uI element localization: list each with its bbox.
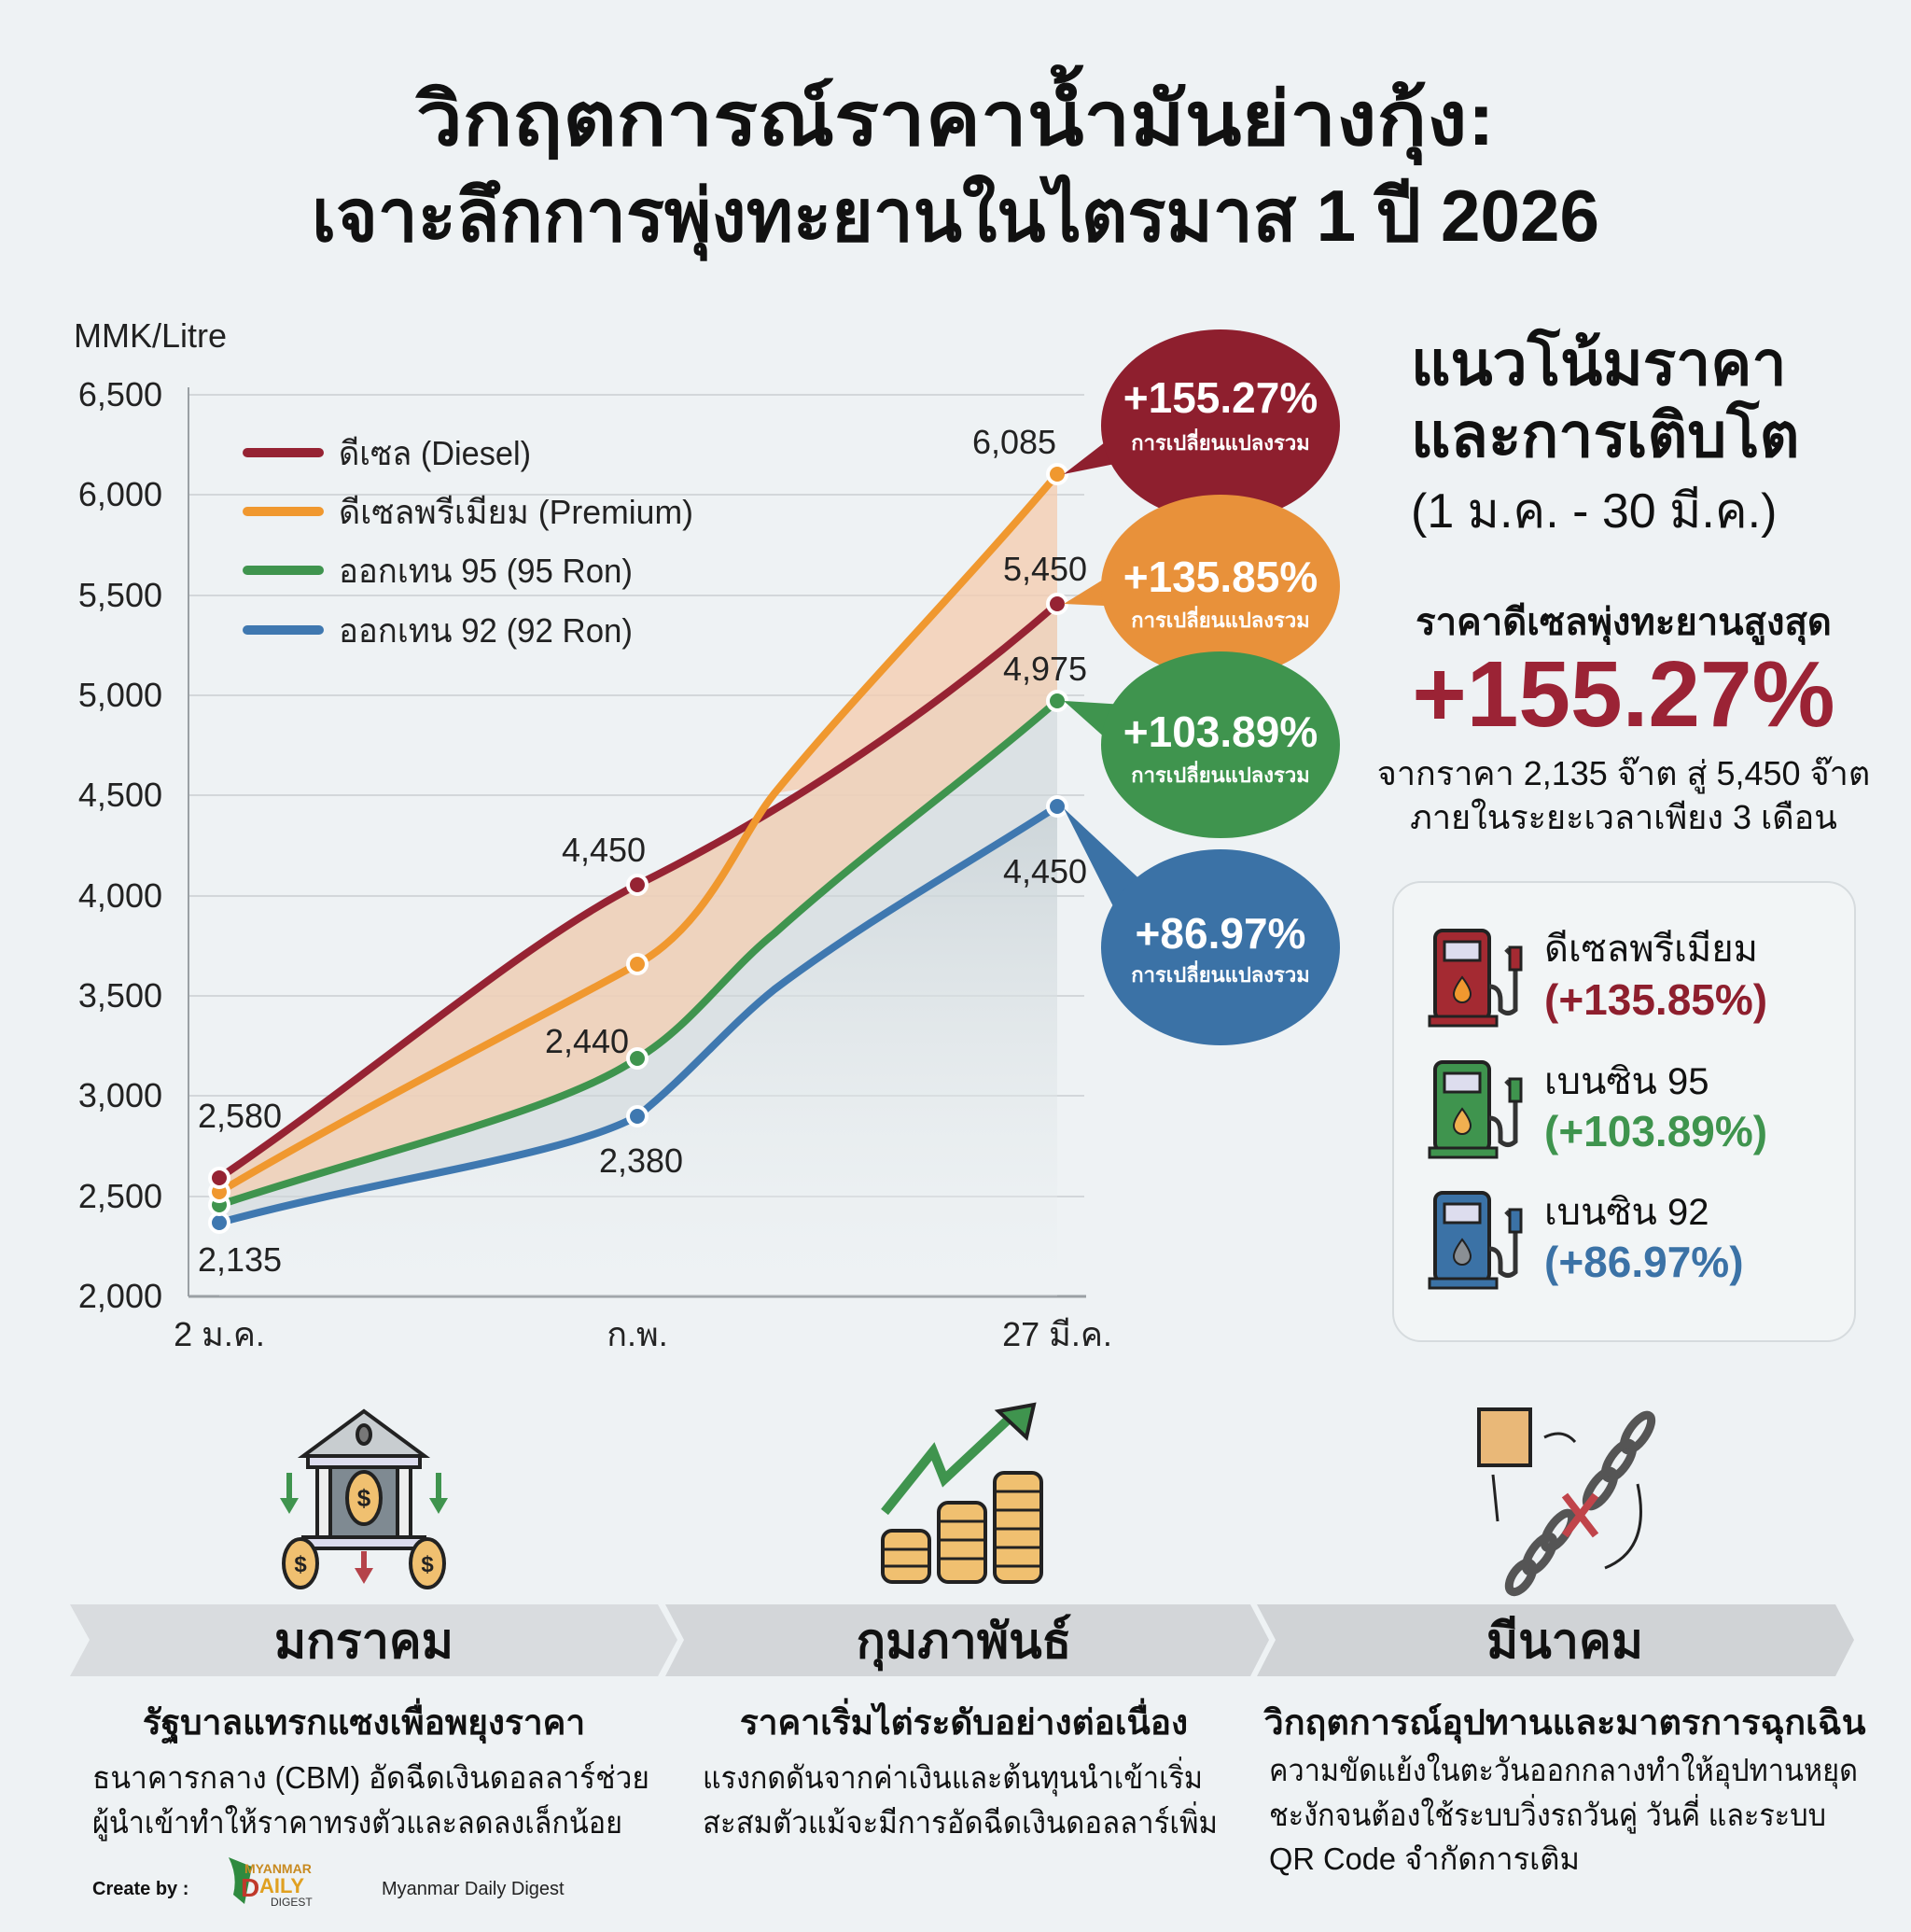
- x axis labels: ก.พ.: [607, 1315, 668, 1353]
- January text: ธนาคารกลาง (CBM) อัดฉีดเงินดอลลาร์ช่วย: [92, 1760, 649, 1795]
- value labels: 4,975: [1003, 650, 1087, 688]
- bubble: premium: [1064, 495, 1340, 678]
- timeline chevrons: [70, 1604, 1854, 1676]
- icon: central bank: $: [294, 1552, 307, 1577]
- bubble: premium: +135.85%: [1123, 553, 1318, 601]
- y axis labels: 5,000: [78, 676, 162, 714]
- panel heading: [1411, 327, 1800, 539]
- February text: [703, 1698, 1218, 1840]
- value labels: 2,440: [545, 1022, 629, 1060]
- logo: AILY: [259, 1874, 304, 1897]
- value labels: 5,450: [1003, 550, 1087, 588]
- value labels: 4,450: [1003, 852, 1087, 890]
- legend: ออกเทน 92 (92 Ron): [339, 611, 633, 650]
- headline stat: ภายในระยะเวลาเพียง 3 เดือน: [1410, 798, 1837, 836]
- March text: QR Code จำกัดการเติม: [1269, 1841, 1580, 1876]
- timeline chevrons: กุมภาพันธ์: [857, 1614, 1071, 1672]
- March text: วิกฤตการณ์อุปทานและมาตรการฉุกเฉิน: [1262, 1703, 1866, 1744]
- title: เจาะลึกการพุ่งทะยานในไตรมาส 1 ปี 2026: [312, 174, 1599, 261]
- logo: D: [241, 1873, 259, 1902]
- panel heading: แนวโน้มราคา: [1411, 327, 1787, 398]
- panel heading: และการเติบโต: [1411, 399, 1800, 469]
- icon: blue pump: [1430, 1193, 1521, 1288]
- logo: [229, 1857, 313, 1909]
- icon: central bank: [280, 1411, 448, 1588]
- data point markers: [210, 465, 1067, 1232]
- March text: ความขัดแย้งในตะวันออกกลางทำให้อุปทานหยุด: [1269, 1753, 1858, 1789]
- February text: สะสมตัวแม้จะมีการอัดฉีดเงินดอลลาร์เพิ่ม: [703, 1801, 1218, 1840]
- bubble: diesel: การเปลี่ยนแปลงรวม: [1131, 427, 1310, 455]
- y axis labels: [78, 375, 162, 1315]
- fuel summary box: (+135.85%): [1544, 975, 1767, 1024]
- legend: ออกเทน 95 (95 Ron): [339, 552, 633, 590]
- x axis labels: [174, 1315, 1112, 1353]
- callout bubbles: [1064, 329, 1340, 1045]
- area fills: [219, 806, 1057, 1296]
- value labels: 2,580: [198, 1097, 282, 1135]
- title: [312, 64, 1599, 261]
- x axis labels: 2 ม.ค.: [174, 1315, 265, 1353]
- timeline chevrons: มกราคม: [274, 1615, 453, 1669]
- value labels: 2,380: [599, 1141, 683, 1180]
- bubble: 95: [1064, 651, 1340, 838]
- y axis labels: 6,000: [78, 475, 162, 513]
- headline stat: ราคาดีเซลพุ่งทะยานสูงสุด: [1416, 602, 1832, 646]
- timeline chevrons: มีนาคม: [1486, 1615, 1643, 1669]
- icon: broken supply chain: [1479, 1409, 1656, 1596]
- February text: แรงกดดันจากค่าเงินและต้นทุนนำเข้าเริ่ม: [703, 1757, 1203, 1797]
- bubble: 95: +103.89%: [1123, 707, 1318, 756]
- February text: ราคาเริ่มไต่ระดับอย่างต่อเนื่อง: [740, 1698, 1188, 1742]
- panel heading: (1 ม.ค. - 30 มี.ค.): [1411, 484, 1777, 539]
- icon: rising coins: [883, 1405, 1041, 1582]
- y axis labels: 3,500: [78, 976, 162, 1015]
- y axis labels: 5,500: [78, 576, 162, 614]
- bubble: 92: [1064, 808, 1340, 1045]
- y axis labels: 2,500: [78, 1177, 162, 1215]
- y axis labels: 2,000: [78, 1277, 162, 1315]
- footer credit: Myanmar Daily Digest: [382, 1879, 565, 1899]
- bubble: 92: การเปลี่ยนแปลงรวม: [1131, 959, 1310, 987]
- legend: ดีเซลพรีเมียม (Premium): [339, 493, 693, 531]
- bubble: diesel: +155.27%: [1123, 373, 1318, 422]
- legend: ดีเซล (Diesel): [339, 434, 531, 472]
- axis unit label: MMK/Litre: [74, 316, 227, 355]
- series lines: [219, 474, 1057, 1223]
- footer credit: Create by :: [92, 1879, 188, 1899]
- January text: [92, 1698, 649, 1841]
- icon: red pump: [1430, 931, 1521, 1026]
- headline stat: จากราคา 2,135 จ๊าต สู่ 5,450 จ๊าต: [1377, 754, 1870, 794]
- bubble: premium: การเปลี่ยนแปลงรวม: [1131, 605, 1310, 632]
- bubble: 95: การเปลี่ยนแปลงรวม: [1131, 760, 1310, 787]
- fuel summary box: [1393, 882, 1855, 1341]
- fuel summary box: (+103.89%): [1544, 1107, 1767, 1155]
- logo: MYANMAR: [244, 1861, 312, 1876]
- value labels: [198, 423, 1087, 1279]
- value labels: 2,135: [198, 1240, 282, 1279]
- March text: ชะงักจนต้องใช้ระบบวิ่งรถวันคู่ วันคี่ และระบบ: [1269, 1794, 1826, 1834]
- y axis labels: 4,000: [78, 876, 162, 915]
- fuel summary box: เบนซิน 95: [1544, 1061, 1709, 1102]
- footer credit: [92, 1857, 565, 1909]
- title: วิกฤตการณ์ราคาน้ำมันย่างกุ้ง:: [415, 64, 1495, 166]
- y axis labels: 6,500: [78, 375, 162, 413]
- value labels: 6,085: [972, 423, 1056, 461]
- icon: central bank: $: [421, 1552, 434, 1577]
- January text: รัฐบาลแทรกแซงเพื่อพยุงราคา: [143, 1698, 585, 1744]
- legend: [247, 434, 693, 650]
- x axis labels: 27 มี.ค.: [1002, 1315, 1112, 1353]
- y axis labels: 3,000: [78, 1076, 162, 1114]
- January text: ผู้นำเข้าทำให้ราคาทรงตัวและลดลงเล็กน้อย: [92, 1804, 622, 1841]
- fuel summary box: ดีเซลพรีเมียม: [1544, 929, 1758, 970]
- right summary panel: [1377, 327, 1870, 1341]
- icon: green pump: [1430, 1062, 1521, 1157]
- bubble: diesel: [1064, 329, 1340, 522]
- y axis labels: 4,500: [78, 776, 162, 814]
- value labels: 4,450: [562, 831, 646, 869]
- March text: [1262, 1703, 1866, 1876]
- headline stat: +155.27%: [1412, 642, 1835, 747]
- fuel summary box: เบนซิน 92: [1544, 1192, 1709, 1233]
- line chart: [74, 316, 1112, 1353]
- logo: DIGEST: [271, 1896, 313, 1909]
- headline stat: [1377, 602, 1870, 836]
- icon: central bank: $: [357, 1484, 371, 1512]
- fuel summary box: (+86.97%): [1544, 1238, 1744, 1286]
- bubble: 92: +86.97%: [1136, 909, 1305, 958]
